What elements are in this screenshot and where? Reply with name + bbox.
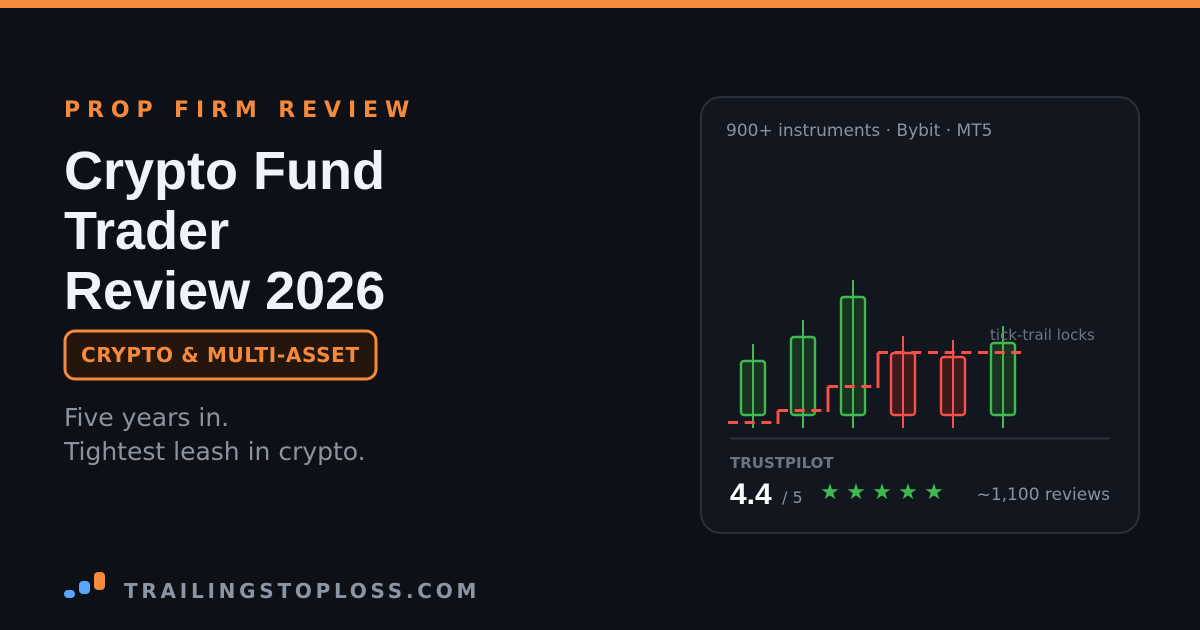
candlestick chart bbox=[741, 280, 1015, 428]
stars: ★ bbox=[846, 480, 866, 505]
candle 3 bbox=[841, 280, 865, 428]
chart annotation: tick-trail locks bbox=[990, 326, 1095, 344]
footer domain: TRAILINGSTOPLOSS.COM bbox=[124, 579, 480, 603]
rating scale: / 5 bbox=[782, 488, 803, 507]
stars: ★ bbox=[924, 480, 944, 505]
stars: ★ bbox=[872, 480, 892, 505]
stars bbox=[820, 480, 944, 505]
candle 2 bbox=[791, 320, 815, 428]
rating score: 4.4 bbox=[730, 478, 772, 511]
panel: chart card bbox=[701, 97, 1139, 533]
trailing stop line bbox=[728, 352, 1021, 424]
candle 5 bbox=[941, 340, 965, 428]
review count: ~1,100 reviews bbox=[977, 485, 1110, 505]
eyebrow heading: PROP FIRM REVIEW bbox=[64, 98, 416, 123]
title: Crypto Fund bbox=[64, 141, 385, 201]
subtitle: Five years in. bbox=[64, 403, 229, 432]
stars: ★ bbox=[820, 480, 840, 505]
title: Trader bbox=[64, 201, 229, 261]
badge: crypto and multi-asset: CRYPTO & MULTI-ASSET bbox=[81, 343, 360, 367]
badge: crypto and multi-asset bbox=[65, 331, 376, 379]
title: Review 2026 bbox=[64, 261, 385, 321]
candle 6 bbox=[991, 326, 1015, 428]
candle 1 bbox=[741, 344, 765, 428]
divider bbox=[730, 438, 1110, 440]
candle 4 bbox=[891, 336, 915, 428]
title bbox=[64, 141, 385, 321]
card caption: 900+ instruments · Bybit · MT5 bbox=[726, 121, 992, 141]
footer logo icon bbox=[64, 572, 105, 598]
stars: ★ bbox=[898, 480, 918, 505]
subtitle bbox=[63, 403, 366, 466]
top accent bar bbox=[0, 0, 1200, 8]
trustpilot label: TRUSTPILOT bbox=[730, 454, 834, 472]
subtitle: Tightest leash in crypto. bbox=[63, 437, 366, 466]
